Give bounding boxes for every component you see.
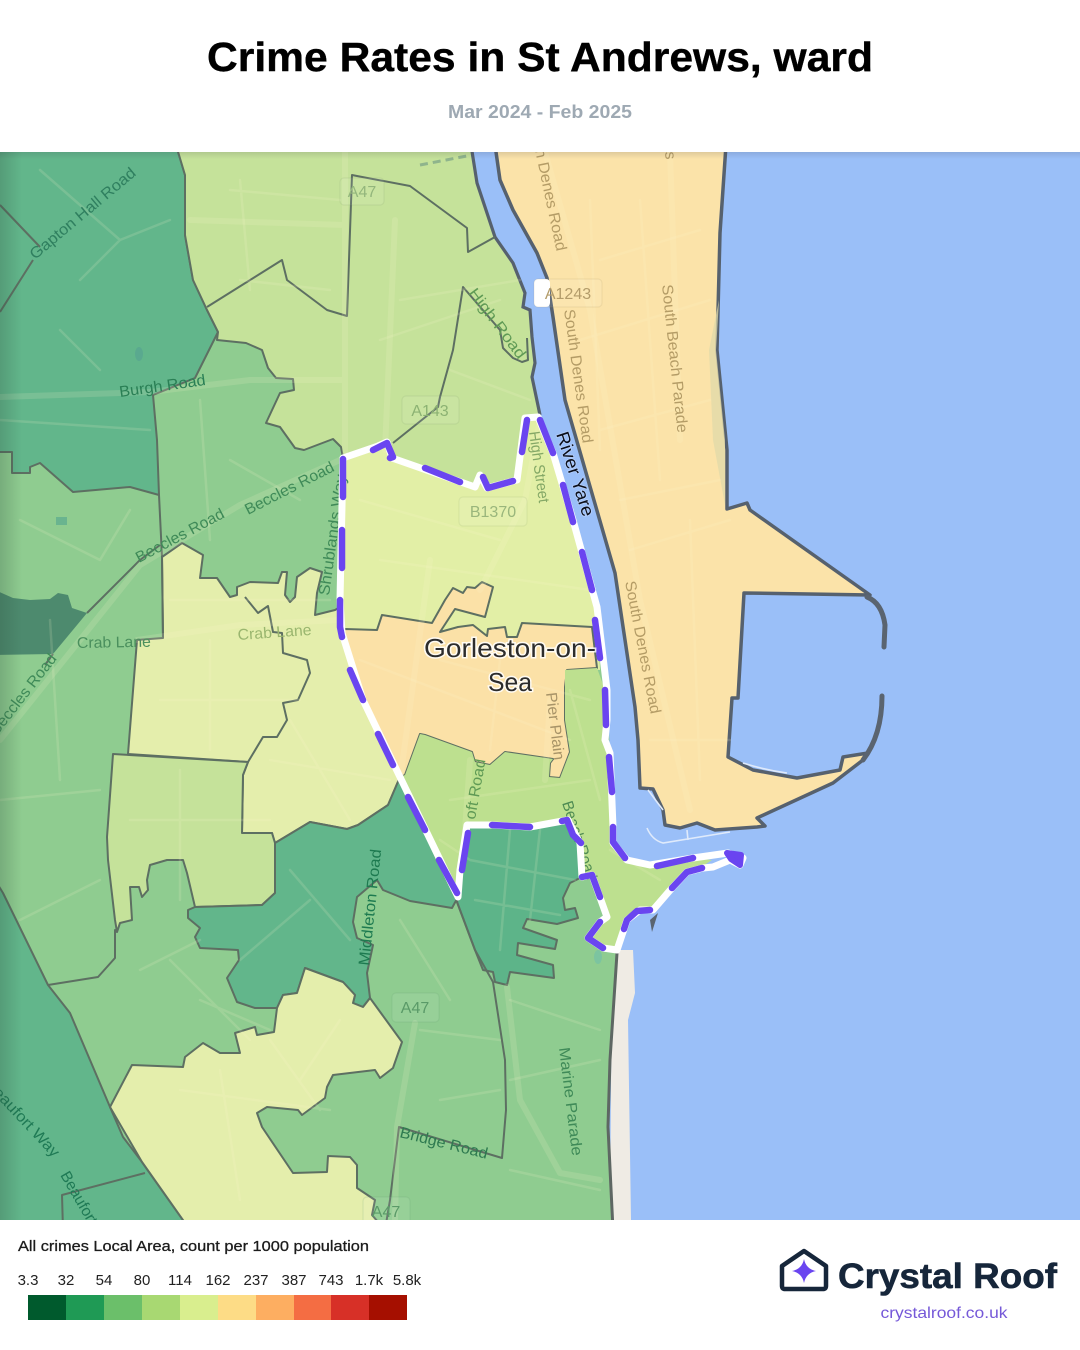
ponds	[56, 347, 602, 964]
road labels: Bridge Road	[398, 1124, 489, 1163]
pale area: south	[110, 968, 402, 1230]
ward boundary: purple dashes	[340, 420, 702, 948]
west river bank	[471, 145, 540, 415]
place label: Gorleston-on-Sea: Gorleston-on-	[424, 633, 596, 663]
legend scale values: 3.3	[18, 1272, 38, 1289]
icon: house with star	[782, 1251, 826, 1289]
place label: Gorleston-on-Sea	[424, 636, 596, 693]
road number shields: A1243	[545, 286, 591, 303]
beach strip	[610, 950, 635, 1220]
road number shields: A143	[411, 403, 449, 420]
legend scale values: 32	[58, 1272, 74, 1289]
road labels: High Street	[525, 430, 552, 504]
road labels: Pier Plain	[542, 691, 567, 761]
legend scale values: 1.7k	[355, 1272, 384, 1289]
road labels: Beccles Road	[133, 506, 227, 567]
ward boundary: white base line	[340, 417, 743, 950]
road labels: Marine Parade	[555, 1046, 585, 1157]
road labels: South Denes Road	[621, 580, 664, 715]
sea	[474, 152, 1080, 1220]
road labels: Beccles Road	[242, 459, 337, 519]
road labels: Beaufort	[57, 1168, 101, 1228]
light green area: north	[176, 145, 540, 488]
road labels: s	[661, 151, 679, 160]
place label: Gorleston-on-Sea: Sea	[488, 667, 533, 697]
road labels: High Road	[465, 285, 529, 362]
very dark area: west	[0, 590, 87, 655]
legend scale values	[18, 1272, 422, 1289]
legend scale values: 80	[134, 1272, 150, 1289]
road labels: Beach Road	[558, 799, 600, 882]
dark green area: Gapton	[0, 145, 218, 495]
legend scale values: 387	[281, 1272, 307, 1289]
legend scale values: 743	[318, 1272, 344, 1289]
road number shields: A47	[401, 1000, 429, 1017]
legend scale values: 114	[168, 1272, 192, 1289]
legend title: All crimes Local Area, count per 1000 population	[18, 1238, 369, 1255]
ward: tan central part	[342, 582, 597, 778]
inner boundary lines	[0, 175, 528, 1230]
road number shields: A47	[372, 1204, 400, 1221]
east coast line	[608, 953, 617, 1230]
road labels: Crab Lane	[77, 634, 151, 652]
rock sliver	[650, 913, 658, 932]
ward: pale north part	[340, 417, 600, 670]
ward boundary: purple blob at harbour mouth	[727, 853, 741, 865]
legend scale values: 237	[243, 1272, 269, 1289]
legend scale values: 5.8k	[393, 1272, 422, 1289]
map edge shading	[0, 152, 1080, 1220]
title: Crime Rates in St Andrews, ward	[207, 34, 873, 80]
light green block: south-west	[107, 754, 275, 932]
road labels: South Beach Parade	[658, 284, 691, 434]
legend scale values: 54	[96, 1272, 112, 1289]
logo: Crystal Roof	[782, 1251, 1057, 1322]
legend colour bar	[28, 1295, 407, 1320]
pale area: Crab Lane	[128, 543, 400, 843]
legend scale values: 162	[205, 1272, 231, 1289]
logo wordmark: Crystal Roof	[838, 1257, 1057, 1296]
road labels: Burgh Road	[118, 372, 207, 401]
road labels: Shrublands Way	[316, 473, 350, 597]
harbour arms	[863, 597, 885, 760]
road number shields: B1370	[470, 504, 516, 521]
road network	[0, 152, 730, 1220]
jetty and shoreline slivers	[647, 763, 787, 843]
ward: light green south part	[400, 668, 712, 950]
road number shields	[340, 178, 602, 1226]
road labels: Crab Lane	[237, 622, 312, 644]
dark green area: Beaufort	[0, 880, 190, 1230]
road labels: oft Road	[462, 758, 490, 821]
beach sliver on east coast	[709, 300, 725, 505]
road labels	[0, 147, 691, 1228]
road number shields: A47	[348, 184, 376, 201]
website url: crystalroof.co.uk	[880, 1305, 1009, 1322]
road labels: Gapton Hall Road	[27, 165, 139, 263]
medium green base areas	[0, 338, 616, 1220]
river label: River Yare	[552, 429, 598, 519]
road labels: Middleton Road	[356, 848, 385, 966]
subtitle: date range: Mar 2024 - Feb 2025	[448, 102, 632, 122]
legend	[18, 1238, 422, 1320]
ward: dark green part	[457, 820, 582, 985]
railway fragment at top edge	[420, 155, 472, 165]
tan area: South Denes	[495, 145, 870, 830]
dark green area: Middleton	[188, 777, 458, 1008]
road labels: South Denes Road	[560, 308, 596, 444]
road labels: h Denes Road	[531, 147, 569, 253]
